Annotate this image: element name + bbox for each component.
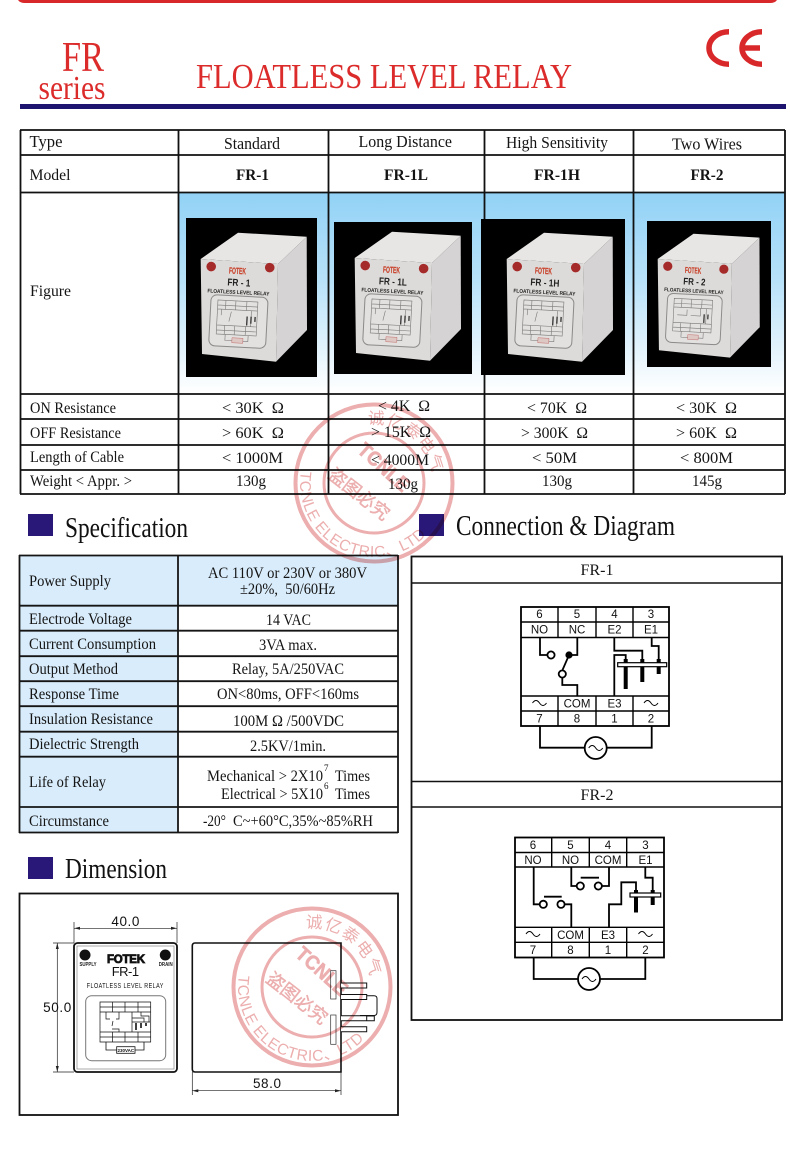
terminal labels: 6 [536,609,543,621]
watermark stamp: lower: TCNLE [291,943,352,1001]
figure: FR-2 relay photo: FR - 2 [683,276,706,289]
row: Model: FR-1 [236,167,269,184]
row: ON Resistance: < 30K Ω [222,400,284,417]
series logo: FR series: series [38,70,106,107]
diagram heading: FR-2: FR-2 [581,787,613,804]
row label: Figure: Figure [30,283,71,300]
figure row background [179,193,785,394]
spec: Dielectric Strength: Dielectric Strength [29,736,139,753]
icon: CE mark [709,32,762,64]
row: Model [30,167,724,184]
row: OFF Resistance: > 60K Ω [676,425,737,442]
spec: Circumstance [29,813,373,830]
row: Type: Two Wires [672,135,742,154]
drawing: front view: SUPPLY [80,962,97,968]
terminal labels: 4 [605,840,612,852]
terminal labels: COM [557,930,584,942]
terminal labels: 8 [567,945,574,957]
table: model comparison [20,130,785,494]
header rule [20,104,786,109]
terminal labels: NO [524,855,542,867]
figure: FR-1L relay photo: FLOATLESS LEVEL RELAY [361,287,424,297]
terminal labels: 1 [611,714,618,726]
row: ON Resistance: < 4K Ω [378,398,430,415]
row: ON Resistance: < 30K Ω [676,400,737,417]
figure: FR-1 relay photo: FLOATLESS LEVEL RELAY [207,288,270,298]
terminal labels: 3 [642,840,649,852]
row: Weight: 130g [388,476,418,493]
drawing: front view [43,914,177,1072]
figure: FR-1 relay photo: FOTEK [229,265,247,276]
row: Weight: 130g [236,473,266,490]
spec: Output Method: Output Method [29,661,118,678]
panel: dimension [20,894,398,1115]
row: Type: High Sensitivity [506,133,609,152]
watermark stamp: centre [294,402,454,564]
figure: FR-1H relay photo: FOTEK [535,265,553,276]
terminal labels: E3 [601,930,615,942]
row: ON Resistance [30,398,737,417]
terminal labels: NO [531,624,548,636]
heading: Connection & Diagram: Connection & Diagram [456,511,675,542]
spec: Power Supply: AC 110V or 230V or 380V [208,565,367,582]
spec: Power Supply [29,565,367,598]
watermark stamp: lower: TCNLE ELECTRIC、LTD [238,976,362,1061]
terminal labels: 4 [611,609,618,621]
terminal labels: NO [562,855,579,867]
figure: FR-1L relay photo [334,222,472,374]
terminal labels: 6 [530,840,536,852]
terminal labels: E3 [607,698,622,710]
row: Type: Long Distance [358,132,452,151]
terminal labels: E1 [638,855,653,867]
watermark stamp: lower: 盗图必究 [262,968,331,1028]
row: Model: FR-2 [690,167,724,184]
spec: Circumstance: C~+60°C,35%~85%RH [233,813,373,830]
terminal labels: E2 [607,624,622,636]
figure: FR-1 relay photo [186,218,317,377]
figure: FR-2 relay photo: FOTEK [685,265,702,276]
dimension label: height 50.0: 50.0 [43,1000,72,1015]
row: Model: Model [30,167,71,184]
figure: FR-1L relay photo: FR - 1L [379,276,407,289]
spec: Dielectric Strength [29,736,326,755]
spec: Insulation Resistance: Insulation Resistance [29,711,153,728]
row: OFF Resistance: > 60K Ω [222,425,284,442]
figure: FR-2 relay photo: FLOATLESS LEVEL RELAY [664,287,724,296]
watermark stamp: centre: TCNLE [353,439,414,497]
spec: Life of Relay: Times [335,768,370,785]
top red bar [18,0,777,3]
spec: Life of Relay [29,763,370,803]
figure: FR-2 relay photo [647,221,771,367]
spec: Life of Relay: Life of Relay [29,774,106,791]
heading: Dimension [28,854,167,885]
terminal labels: E1 [644,624,658,636]
drawing: side view [192,943,377,1095]
drawing: front view: 230VAC [117,1048,135,1053]
row: Type: Standard [224,134,281,153]
spec: Insulation Resistance: 100M Ω /500VDC [233,713,344,730]
table: specification [19,555,398,833]
row: Weight: 145g [692,473,722,490]
row: OFF Resistance: > 300K Ω [521,425,588,442]
terminal labels: 7 [530,945,536,957]
watermark stamp: lower: 诚亿泰电气 [306,914,382,976]
spec: Dielectric Strength: 2.5KV/1min. [250,738,326,755]
terminal labels: 2 [642,945,649,957]
terminal labels: 5 [567,840,574,852]
spec: Output Method: Relay, 5A/250VAC [232,661,344,678]
row: Length of Cable: < 800M [680,450,733,467]
figure: FR-1L relay photo: FOTEK [383,264,401,275]
row: Model: FR-1L [384,167,428,184]
spec: Output Method [29,661,344,678]
figure: FR-1H relay photo [481,219,625,375]
diagram: FR-2 wiring [515,838,664,990]
figure: FR-1H relay photo: FR - 1H [530,277,560,290]
title: FLOATLESS LEVEL RELAY [196,57,572,96]
panel: connection diagrams [412,556,782,1020]
series logo: FR series [38,35,106,107]
heading: Specification [28,513,188,544]
row: Weight: 130g [542,473,572,490]
terminal labels: 5 [574,609,580,621]
spec: Circumstance: Circumstance [29,813,109,830]
spec: Power Supply: ±20%, 50/60Hz [240,581,335,598]
row: Type [30,132,742,154]
heading: Specification: Specification [65,513,188,544]
drawing: front view: FOTEK [107,954,146,966]
diagram heading: FR-1: FR-1 [581,562,613,579]
terminal labels: NC [569,624,585,636]
watermark stamp: centre: 盗图必究 [324,464,393,524]
diagram: FR-1 wiring [521,607,669,759]
spec: Response Time [29,686,359,703]
terminal labels: 1 [605,945,611,957]
terminal labels [524,840,653,957]
terminal labels [531,609,658,726]
row: Weight: Weight < Appr. > [30,473,132,490]
spec: Circumstance: -20° [203,813,226,830]
row: Type: Type [30,132,62,151]
row: Length of Cable: < 4000M [371,452,429,469]
spec: Response Time: ON<80ms, OFF<160ms [217,686,359,703]
row: ON Resistance: ON Resistance [30,400,116,417]
row: Weight [30,473,722,493]
spec: Electrode Voltage [29,611,311,629]
row: Length of Cable: < 1000M [222,450,283,467]
row: Length of Cable [30,449,733,469]
dimension label: depth 58.0: 58.0 [253,1076,282,1091]
series logo: FR series: FR [62,35,104,81]
row: ON Resistance: < 70K Ω [527,400,587,417]
spec: Life of Relay: 7 [324,763,329,773]
terminal labels: 8 [574,714,580,726]
spec: Life of Relay: Times [335,786,370,803]
spec: Electrode Voltage: 14 VAC [266,612,311,629]
drawing: front view: FLOATLESS LEVEL RELAY [87,981,164,990]
terminal labels: COM [595,855,621,867]
watermark stamp: centre: TCNLE ELECTRIC、LTD [300,472,424,557]
dimension label: width 40.0: 40.0 [111,914,140,929]
spec: Power Supply: Power Supply [29,573,111,590]
terminal labels: 3 [648,609,654,621]
spec: Current Consumption [29,636,317,654]
spec: Life of Relay: 6 [324,781,329,791]
terminal labels: 7 [536,714,543,726]
spec: Insulation Resistance [29,711,344,730]
watermark stamp: lower [232,906,392,1068]
figure: FR-1H relay photo: FLOATLESS LEVEL RELAY [513,288,576,298]
drawing: front view: DRAIN [159,962,173,968]
row: OFF Resistance: > 15K Ω [371,424,431,441]
row: OFF Resistance: OFF Resistance [30,425,121,442]
spec: Current Consumption: 3VA max. [259,637,317,654]
watermark stamp: centre: 诚亿泰电气 [368,410,444,472]
row: Model: FR-1H [534,167,581,184]
row: Length of Cable: < 50M [532,450,577,467]
row: OFF Resistance [30,424,737,442]
row: Length of Cable: Length of Cable [30,449,124,466]
drawing: front view: FR-1 [112,964,140,979]
terminal labels: COM [564,698,590,710]
spec: Life of Relay: Electrical > 5X10 [221,786,323,803]
figure: FR-1 relay photo: FR - 1 [227,277,251,290]
spec: Life of Relay: Mechanical > 2X10 [207,768,323,785]
terminal labels: 2 [648,714,654,726]
spec: Electrode Voltage: Electrode Voltage [29,611,132,628]
spec: Current Consumption: Current Consumption [29,636,156,653]
heading: Dimension: Dimension [65,854,167,885]
spec: Response Time: Response Time [29,686,119,703]
